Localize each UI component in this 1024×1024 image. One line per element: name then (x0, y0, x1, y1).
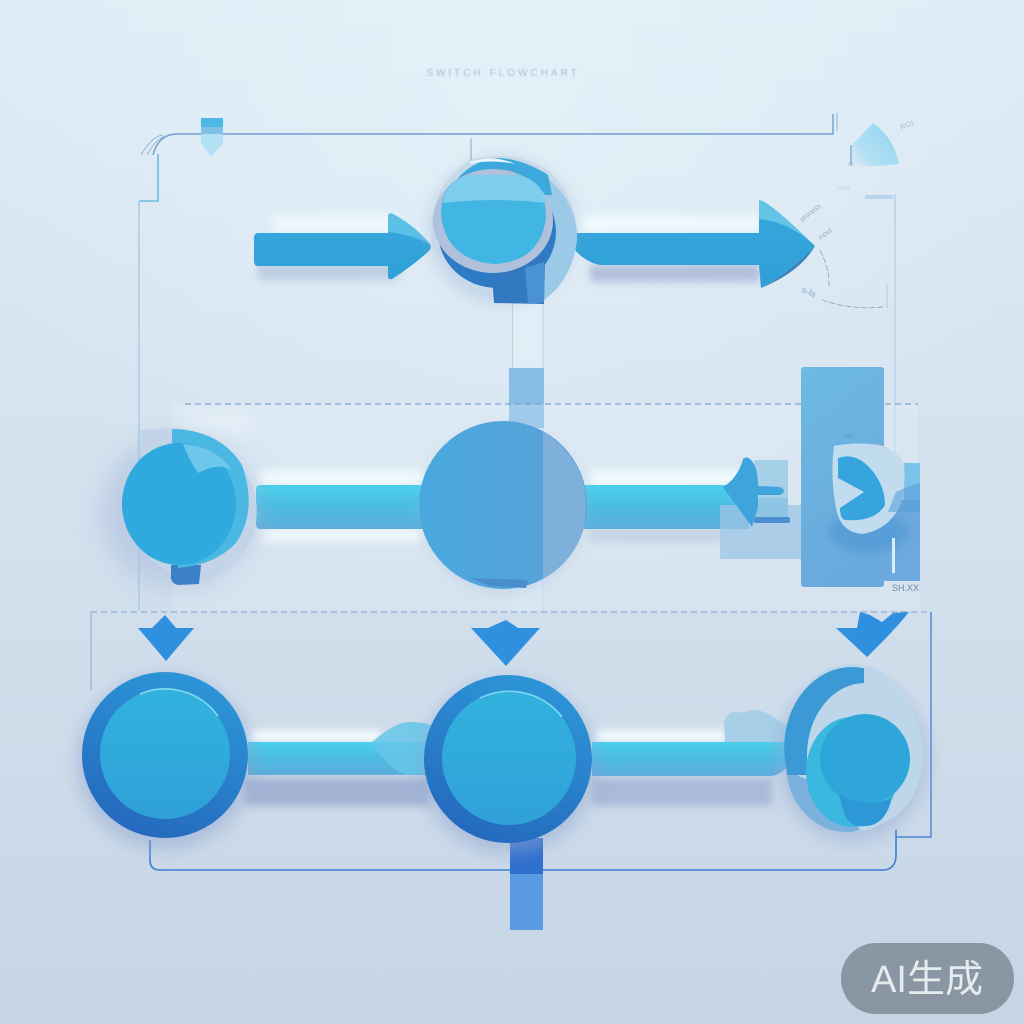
connector bar: bottom left (245, 722, 432, 806)
icon: top right fan shape (848, 119, 915, 168)
node: middle left switch (102, 428, 257, 588)
frame: top flow outline (139, 113, 895, 610)
arrow: top right arrow (575, 200, 815, 288)
annotation: curve notes near top arrow: s-la (800, 285, 817, 299)
middle row panels (172, 404, 919, 610)
annotation: curve notes near top arrow (799, 186, 883, 308)
lines: vertical overlay (512, 560, 543, 612)
vertical connector: top to middle (471, 138, 544, 612)
node: bottom left switch (77, 672, 253, 850)
panel: right media card (720, 367, 920, 593)
node: bottom right switch (776, 664, 928, 842)
connector bar: mid left (256, 470, 426, 542)
node: bottom center switch (420, 675, 596, 854)
node: top switch (428, 156, 577, 304)
badge: AI generated: AI生成 (871, 959, 983, 1001)
annotation: curve notes near top arrow: input (817, 227, 834, 242)
icon: top right fan shape: ROI (899, 119, 915, 132)
vertical connector: bottom (510, 838, 543, 930)
connector bar: mid right (584, 470, 749, 543)
icon: top bookmark tab (201, 118, 223, 157)
panel: right media card: SH.XX (892, 583, 919, 593)
annotation: curve notes near top arrow: process (799, 203, 823, 224)
badge: AI generated (841, 943, 1014, 1014)
arrows: downward (138, 612, 909, 666)
icon: top right fan shape: 01 (848, 162, 854, 168)
title: faint caption: SWITCH FLOWCHART (426, 68, 580, 79)
panel: right media card: label (844, 434, 855, 440)
connector bar: bottom right (592, 710, 786, 806)
arrow: top left arrow (254, 213, 431, 280)
node: middle center circle (419, 421, 587, 590)
annotation: curve notes near top arrow: note (838, 186, 850, 192)
frame: bottom flow outline (91, 612, 931, 870)
